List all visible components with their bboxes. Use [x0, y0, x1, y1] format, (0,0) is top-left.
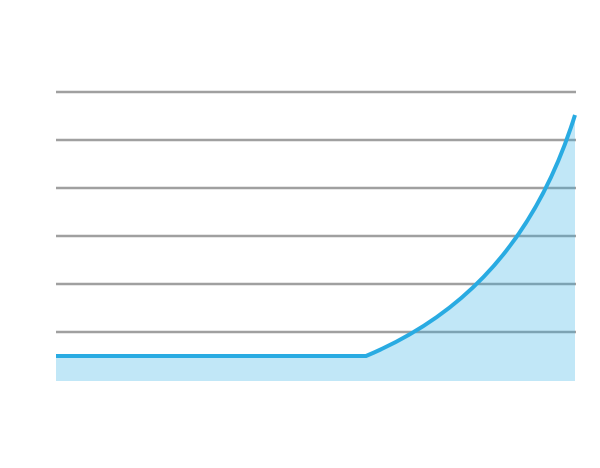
area fill under the curve	[56, 115, 575, 381]
data line	[56, 115, 575, 356]
